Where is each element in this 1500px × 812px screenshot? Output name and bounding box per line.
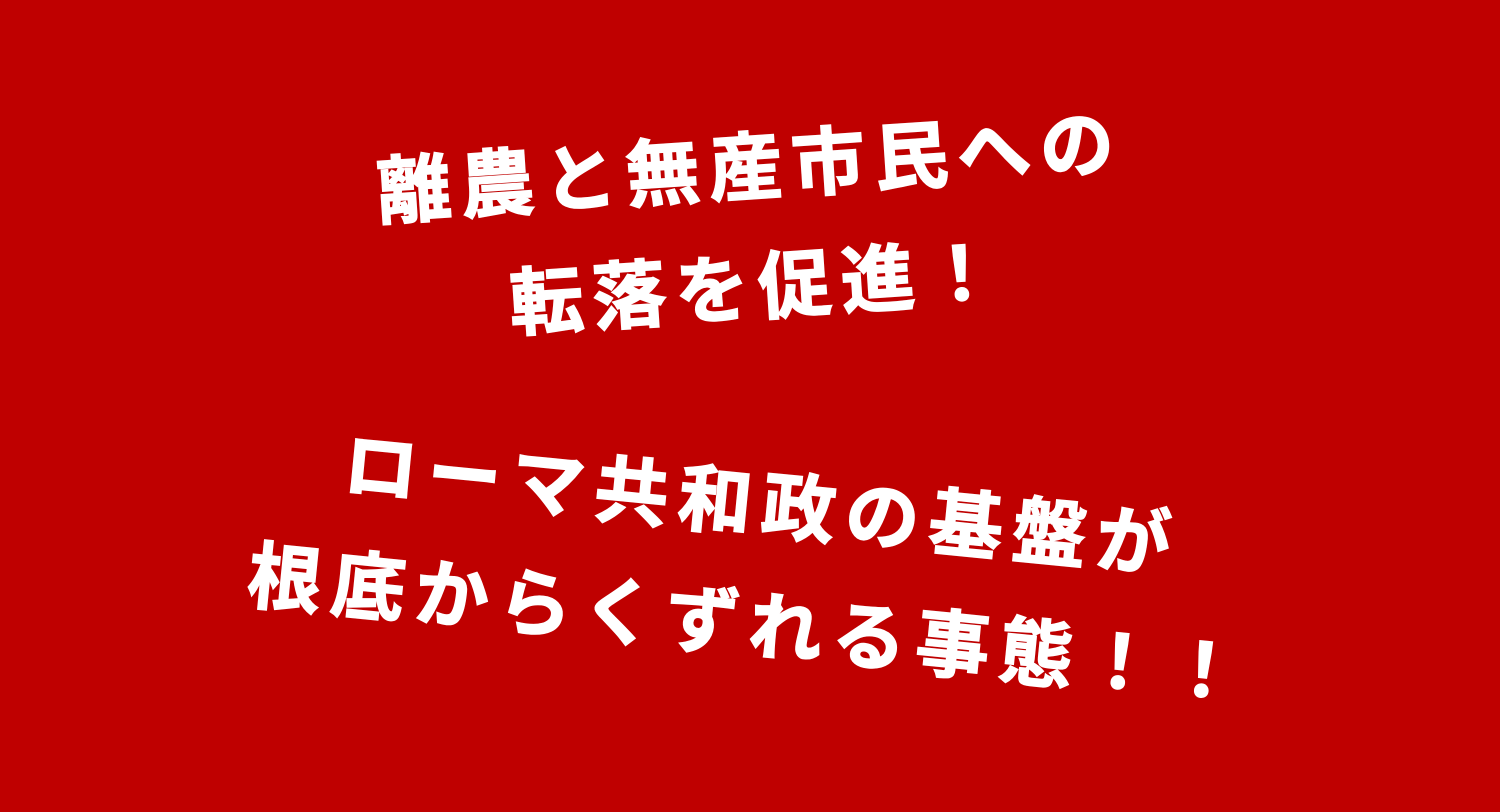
line 3: ローマ共和政の基盤が [340,424,1184,588]
line 4: 根底からくずれる事態！！ [244,535,1254,717]
message: republic foundation collapse [244,424,1254,717]
message: rural exodus [375,102,1125,346]
line 1: 離農と無産市民への [375,102,1125,234]
line 2: 転落を促進！ [507,230,1009,346]
